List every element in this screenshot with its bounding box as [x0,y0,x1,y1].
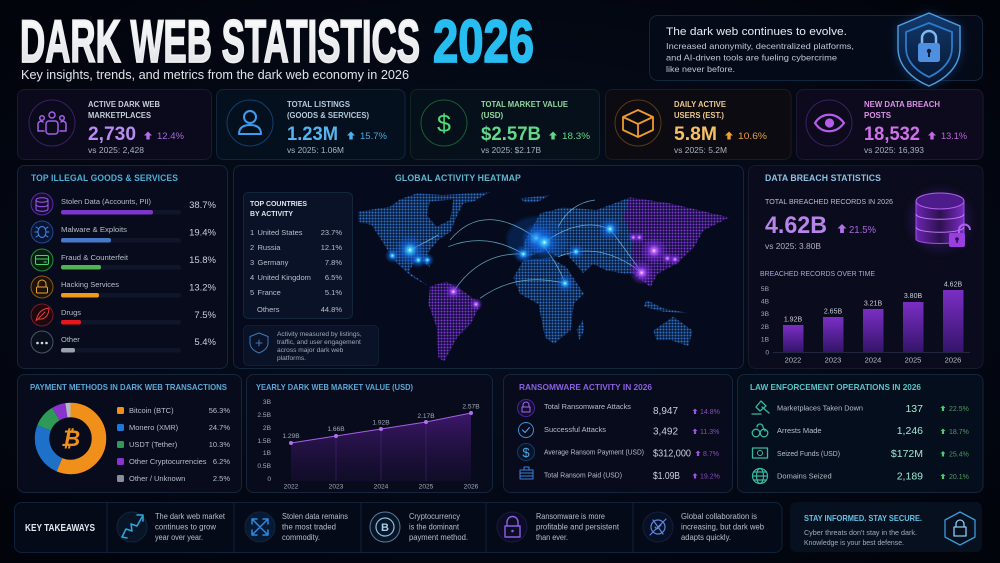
row: malware: 19.4% [189,228,217,238]
icon: cube [615,100,661,146]
takeaway: collaboration: adapts quickly. [681,533,731,542]
row: domains: 20.1% [949,474,969,481]
callout: dark web evolves: Increased anonymity, decentralized platforms, [666,41,854,51]
bar chart: breached records over time: 2025 [905,356,921,364]
table: top countries: 5 [250,288,254,297]
area chart: 2025 [419,484,434,490]
row: arrests [752,424,969,437]
bar chart: breached records over time: 4.62B [944,282,962,288]
kpi card: new data breach posts: 13.1% [941,131,968,142]
callout: stay informed: Knowledge is your best defense. [804,538,904,547]
takeaway: growth [117,512,226,542]
row: total attacks: 14.8% [700,409,720,416]
kpi card: active marketplaces: MARKETPLACES [88,111,152,120]
legend: Bitcoin (BTC) [129,406,174,415]
callout: dark web evolves: The dark web continues to evolve. [666,26,847,38]
kpi card: new data breach posts: POSTS [864,111,892,120]
bar chart: breached records over time: 2022 [785,356,801,364]
row: seized funds: $172M [891,448,923,460]
callout: dark web evolves [650,16,982,80]
area chart: 2.5B [257,412,272,419]
callout: dark web evolves: and AI-driven tools are fueling cybercrime [666,52,837,62]
row: seized funds: Seized Funds (USD) [777,449,840,458]
row: seized funds: 25.4% [949,452,969,458]
row: arrests: 1,246 [897,425,923,437]
row: hacking [31,276,217,298]
row: drugs: Drugs [61,308,81,317]
row: marketplaces: 137 [905,403,923,415]
legend: 2.5% [213,474,230,483]
world map [358,192,729,362]
takeaway: collaboration [643,512,765,542]
kpi card: new data breach posts: 18,532 [864,124,920,145]
row: domains [752,468,969,484]
kpi card: total market value: TOTAL MARKET VALUE [481,100,569,109]
table: top countries: Russia [258,243,281,252]
heading: DATA BREACH STATISTICS [765,173,881,183]
row: total paid: 19.2% [700,474,720,480]
panel: key takeaways [14,502,782,552]
area chart: 1.29B [282,433,300,440]
takeaway: ransomware: profitable and persistent [536,522,620,532]
bar chart: breached records over time: 3B [761,311,770,318]
kpi card: total listings: (GOODS & SERVICES) [287,111,369,120]
row: domains: 2,189 [897,470,923,482]
area chart: 0.5B [257,463,272,470]
legend: Other Cryptocurrencies [129,457,207,466]
area chart: 3B [263,399,272,406]
panel: data breach statistics: TOTAL BREACHED RECORDS IN 2026 [765,197,893,206]
panel: data breach statistics: 4.62B [765,212,827,239]
takeaway: ransomware [497,512,620,542]
takeaway: growth: The dark web market [155,512,226,521]
row: successful: 3,492 [653,426,678,438]
takeaway: ransomware: Ransomware is more [536,512,605,521]
callout: dark web evolves: like never before. [666,64,735,74]
takeaway: crypto: payment method. [409,533,468,542]
area chart: 2024 [374,484,389,490]
kpi card: daily active users: DAILY ACTIVE [674,100,727,109]
kpi card: total listings: vs 2025: 1.06M [287,146,344,155]
takeaway: ransomware: than ever. [536,533,568,542]
row: arrests: Arrests Made [777,426,822,435]
takeaway: stolen data [245,512,348,542]
icon: dollar [421,100,467,146]
bar chart: breached records over time: 0 [765,350,769,356]
row: stolen data: Stolen Data (Accounts, PII) [61,197,151,206]
panel: data breach statistics: 21.5% [849,224,876,236]
table: top countries: United Kingdom [258,273,311,282]
row: fraud: 15.8% [189,255,217,266]
area chart: 1.92B [372,420,390,426]
table: top countries: 12.1% [321,243,342,252]
row: marketplaces: Marketplaces Taken Down [777,404,863,412]
table: top countries: 2 [250,243,254,252]
row: stolen data: 38.7% [189,200,217,211]
note: activity measure [244,326,378,366]
table: top countries: 6.5% [325,273,342,282]
legend: 24.7% [209,423,230,432]
row: seized funds [752,448,969,460]
legend: Monero (XMR) [129,423,179,432]
legend [117,406,230,483]
kpi card: active marketplaces [18,90,212,160]
heading: TOP ILLEGAL GOODS & SERVICES [31,173,178,183]
note: activity measure: across major dark web [277,347,344,354]
bar chart: breached records over time: 3.80B [904,293,922,300]
bar chart: breached records over time: 4B [761,298,770,306]
kpi card: new data breach posts: NEW DATA BREACH [864,100,940,109]
row: stolen data [31,193,217,215]
bar chart: breached records over time: 2026 [945,356,961,364]
bar chart: breached records over time: 2B [761,324,770,331]
hotspots [385,218,681,311]
area chart: 2026 [464,484,479,490]
row: domains: Domains Seized [777,472,832,480]
row: malware: Malware & Exploits [61,225,127,234]
heading: YEARLY DARK WEB MARKET VALUE (USD) [256,382,413,392]
icon: people [29,100,75,146]
callout: stay informed [790,502,982,552]
kpi card: total listings: 15.7% [360,131,388,142]
bar chart: breached records over time: 3.21B [864,300,882,308]
title: DARK WEB STATISTICS [20,8,420,75]
note: activity measure: Activity measured by listings, [277,331,362,338]
heading: KEY TAKEAWAYS [25,522,95,534]
row: marketplaces: 22.5% [949,406,969,413]
heading: RANSOMWARE ACTIVITY IN 2026 [519,382,652,392]
row: total attacks [518,400,720,417]
panel: ransomware activity [504,374,732,492]
kpi card: total market value: 18.3% [562,131,591,142]
kpi card: daily active users [606,90,791,160]
bar chart: breached records over time: 5B [761,286,770,293]
row: fraud [31,249,217,271]
legend: USDT (Tether) [129,440,178,449]
row: drugs [31,304,217,326]
table: top countries: United States [258,228,303,237]
bar chart: breached records over time [760,269,970,364]
table: top countries: 1 [250,228,254,237]
bar chart: breached records over time: 2.65B [824,308,842,316]
row: arrests: 18.7% [949,429,969,436]
bar chart: breached records over time: 2023 [825,356,841,364]
row: total paid [520,467,720,482]
row: average payment: $312,000 [653,448,691,460]
row: fraud: Fraud & Counterfeit [61,253,129,262]
row: average payment: 8.7% [703,451,719,458]
kpi card: total market value: $2.57B [481,124,541,145]
row: successful: 11.3% [700,429,719,436]
row: total paid: $1.09B [653,471,680,482]
row: average payment [518,444,719,460]
note: activity measure: traffic, and user engagement [277,339,361,346]
panel: payment methods [18,374,242,492]
table: top countries: TOP COUNTRIES [250,199,307,208]
row: other: 5.4% [194,337,217,348]
takeaway: crypto [370,512,468,542]
kpi card: total market value: vs 2025: $2.17B [481,146,541,155]
callout: stay informed: Cyber threats don't stay in the dark. [804,528,917,537]
icon: bitcoin: ₿ [61,426,80,451]
bar chart: breached records over time: 1.92B [784,316,802,324]
kpi card: total market value [410,90,600,160]
table: top countries: BY ACTIVITY [250,209,293,218]
heading: PAYMENT METHODS IN DARK WEB TRANSACTIONS [30,382,227,392]
callout: stay informed: STAY INFORMED. STAY SECURE. [804,513,922,523]
area chart: 0 [267,476,271,483]
heading: LAW ENFORCEMENT OPERATIONS IN 2026 [750,382,921,392]
row: hacking: Hacking Services [61,280,119,289]
panel: global activity heatmap [234,166,744,368]
row: total attacks: Total Ransomware Attacks [544,402,631,411]
area chart: 2.57B [462,404,480,410]
icon: dollar: $ [437,110,451,138]
panel: law enforcement operations [738,374,983,492]
subtitle: Key insights, trends, and metrics from the dark web economy in 2026 [21,68,409,82]
area chart [257,399,480,490]
kpi card: active marketplaces: 12.4% [157,131,185,142]
row: drugs: 7.5% [194,310,217,321]
area chart: 1B [263,450,272,457]
takeaway: stolen data: Stolen data remains [282,512,348,521]
table: top countries [244,192,352,318]
area chart: 2B [263,425,272,432]
icon: shield with lock [897,12,961,87]
table: top countries: 23.7% [321,228,342,237]
panel: data breach statistics: vs 2025: 3.80B [765,242,822,251]
kpi card: active marketplaces: ACTIVE DARK WEB [88,100,160,109]
bar chart: breached records over time: 2024 [865,356,881,364]
area chart: 2.17B [417,413,435,420]
icon: hexagon lock [945,512,975,545]
kpi card: total listings: TOTAL LISTINGS [287,100,351,109]
kpi card: total market value: (USD) [481,111,504,120]
takeaway: crypto: is the dominant [409,522,460,532]
kpi card: new data breach posts: vs 2025: 16,393 [864,146,924,155]
panel: data breach statistics [748,166,983,368]
row: malware [31,221,217,243]
arcs [410,200,642,298]
takeaway: collaboration: increasing, but dark web [681,522,765,532]
row: successful [518,422,719,438]
icon: eye [806,100,852,146]
row: average payment: $ [522,445,530,460]
kpi card: total listings: 1.23M [287,124,338,145]
kpi card: active marketplaces: 2,730 [88,124,136,145]
note: activity measure: platforms. [277,355,306,362]
takeaway: growth: year over year. [155,533,203,542]
table: top countries: Others [257,305,280,314]
area chart: 2023 [329,484,344,490]
takeaway: stolen data: the most traded [282,522,336,532]
panel: yearly market value [246,374,492,492]
takeaway: collaboration: Global collaboration is [681,512,757,521]
title: 2026 [433,8,534,75]
table: top countries: France [258,288,281,297]
row: average payment: Average Ransom Payment (USD) [544,448,644,456]
panel: top illegal goods and services [18,166,228,368]
kpi card: daily active users: 5.8M [674,124,717,145]
legend: 56.3% [209,406,230,415]
takeaway: crypto: Cryptocurrency [409,512,460,521]
row: total attacks: 8,947 [653,406,678,417]
takeaway: stolen data: commodity. [282,533,320,542]
table: top countries: 3 [250,258,254,267]
table: top countries: 5.1% [325,288,342,297]
kpi card: daily active users: USERS (EST.) [674,111,724,120]
icon: user [227,100,273,146]
area chart: 2022 [284,484,299,490]
donut chart [42,410,99,467]
kpi card: daily active users: vs 2025: 5.2M [674,146,727,155]
legend: Other / Unknown [129,474,185,483]
area chart: 1.5B [257,438,272,445]
takeaway: growth: continues to grow [155,522,216,532]
heading: GLOBAL ACTIVITY HEATMAP [395,173,521,183]
table: top countries: 4 [250,273,254,282]
legend: 6.2% [213,457,230,466]
row: successful: Successful Attacks [544,425,606,434]
bar chart: breached records over time: BREACHED RECORDS OVER TIME [760,269,875,278]
icon: database with open lock [910,190,970,250]
table: top countries: Germany [258,258,289,267]
kpi card: new data breach posts [796,90,983,160]
table: top countries: 44.8% [321,305,342,314]
row: total paid: Total Ransom Paid (USD) [544,470,622,480]
area chart: 1.66B [327,426,345,433]
row: other: Other [61,335,80,344]
kpi card: active marketplaces: vs 2025: 2,428 [88,146,144,155]
row: marketplaces [752,401,969,415]
kpi card: total listings [216,90,405,160]
row: other [31,331,217,353]
legend: 10.3% [209,440,230,449]
kpi card: daily active users: 10.6% [738,131,768,142]
table: top countries: 7.8% [325,258,342,267]
row: hacking: 13.2% [189,282,217,294]
bar chart: breached records over time: 1B [761,336,770,344]
takeaway: crypto: B [381,522,389,534]
